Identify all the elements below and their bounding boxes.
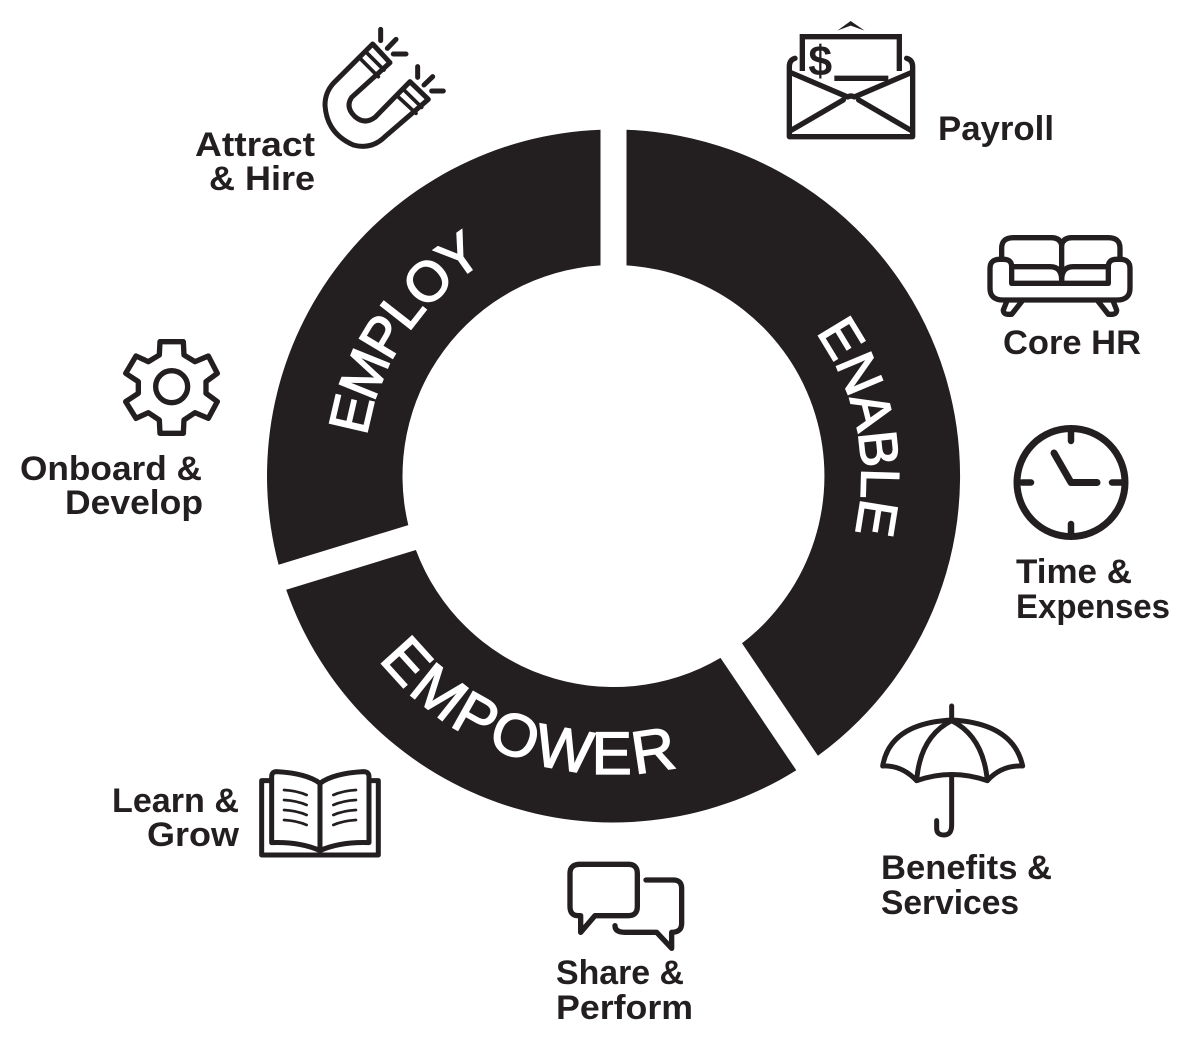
label: Attract <box>195 126 315 164</box>
segment: ENABLE: ENABLE <box>818 316 900 536</box>
item: Share & Perform <box>556 864 693 1027</box>
label <box>881 849 1052 922</box>
item: Attract & Hire <box>195 29 443 198</box>
icon: magnet <box>325 29 443 146</box>
label <box>1016 553 1170 626</box>
label: Benefits & <box>881 849 1052 887</box>
icon: open book <box>262 772 378 855</box>
ring diagram <box>267 130 960 822</box>
label: Time & <box>1016 553 1132 591</box>
label: & Hire <box>209 160 315 198</box>
label <box>556 954 693 1027</box>
label: Core HR <box>1003 324 1141 362</box>
label: Share & <box>556 954 684 992</box>
label: Develop <box>65 484 203 522</box>
icon: speech bubbles <box>570 864 682 948</box>
icon: clock <box>1017 428 1125 536</box>
item: Time & Expenses <box>1016 428 1170 626</box>
icon: sofa <box>990 238 1130 314</box>
item: Learn & Grow <box>112 772 378 855</box>
label: Grow <box>147 816 240 854</box>
icon: umbrella <box>883 706 1023 835</box>
segment: EMPOWER <box>286 550 796 822</box>
label: Services <box>881 884 1019 922</box>
segment: EMPLOY <box>267 130 600 565</box>
segment: EMPLOY: EMPLOY <box>328 228 473 433</box>
item: Payroll <box>789 21 1054 148</box>
label: Payroll <box>938 110 1054 148</box>
label: Perform <box>556 989 693 1027</box>
icon: gear <box>126 342 217 433</box>
label: Onboard & <box>20 450 202 488</box>
segment: EMPOWER: EMPOWER <box>380 634 676 775</box>
label: Expenses <box>1016 588 1170 626</box>
item: Onboard & Develop <box>20 342 217 522</box>
label: Learn & <box>112 782 239 820</box>
label <box>112 782 240 854</box>
icon: envelope with pay cheque: $ <box>808 38 832 86</box>
icon: envelope with pay cheque <box>789 21 913 137</box>
label <box>195 126 315 198</box>
item: Benefits & Services <box>881 706 1052 922</box>
item: Core HR <box>990 238 1141 362</box>
segment: ENABLE <box>626 130 960 756</box>
label <box>20 450 203 522</box>
